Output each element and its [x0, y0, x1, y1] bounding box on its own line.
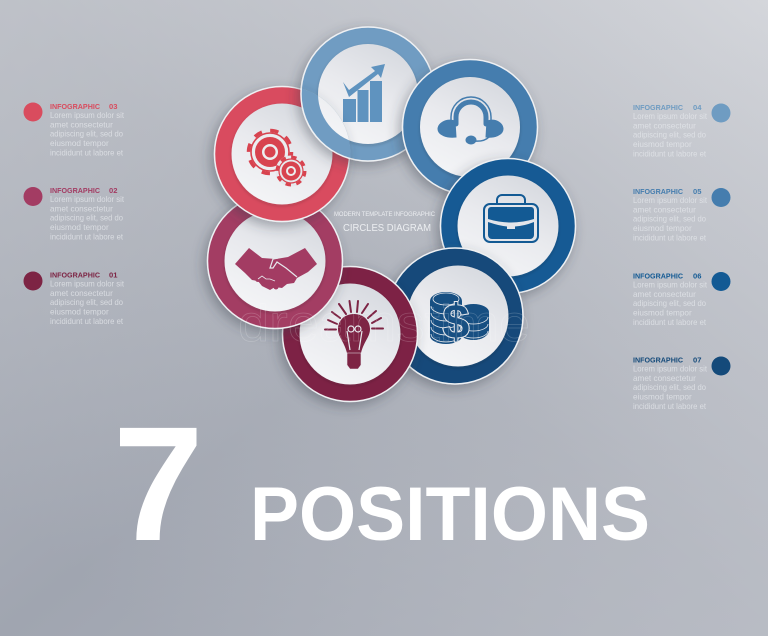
- legend item 03: eiusmod tempor: [50, 139, 109, 148]
- panel: circle 04 overlap onto circle 03: [290, 86, 350, 172]
- legend item 03: Lorem ipsum dolor sit: [50, 111, 125, 120]
- legend item 07: [633, 356, 730, 411]
- panel: circle 07 coins: [387, 248, 523, 384]
- legend item 05: adipiscing elit, sed do: [633, 215, 706, 224]
- legend item 06: [633, 272, 730, 327]
- legend item 04: amet consectetur: [633, 121, 696, 130]
- legend item 01: Lorem ipsum dolor sit: [50, 280, 125, 288]
- legend item 06: 06: [693, 272, 701, 280]
- watermark: dreamstime: [238, 295, 530, 353]
- legend item 01: incididunt ut labore et: [50, 317, 124, 326]
- center caption: CIRCLES DIAGRAM: [343, 223, 431, 234]
- legend item 06: incididunt ut labore et: [633, 318, 707, 327]
- legend item 06: adipiscing elit, sed do: [633, 299, 706, 308]
- legend item 02: [24, 186, 125, 241]
- legend item 02: INFOGRAPHIC: [50, 186, 100, 195]
- legend item 07: INFOGRAPHIC: [633, 356, 683, 364]
- center caption: [334, 212, 436, 234]
- legend item 04: 04: [693, 103, 702, 112]
- legend item 06: INFOGRAPHIC: [633, 272, 683, 280]
- legend item 02: 02: [109, 186, 117, 195]
- legend item 06: eiusmod tempor: [633, 308, 692, 318]
- legend item 07: amet consectetur: [633, 374, 696, 383]
- legend item 03: [24, 102, 125, 157]
- legend item 05: eiusmod tempor: [633, 224, 692, 233]
- legend item 07: adipiscing elit, sed do: [633, 383, 706, 392]
- legend item 03: incididunt ut labore et: [50, 148, 124, 157]
- legend item 06: amet consectetur: [633, 290, 696, 299]
- legend item 04: incididunt ut labore et: [633, 149, 707, 158]
- title number 7: 7: [113, 392, 204, 575]
- panel: circle 07 coins: $: [443, 296, 470, 349]
- legend item 07: Lorem ipsum dolor sit: [633, 364, 708, 374]
- panel: circle 04 analytics: [301, 27, 435, 161]
- legend item 01: [24, 270, 125, 326]
- panel: circle 03 gears: [214, 86, 350, 222]
- legend item 04: adipiscing elit, sed do: [633, 131, 706, 140]
- legend item 02: Lorem ipsum dolor sit: [50, 195, 125, 204]
- panel: circle 02 handshake: [208, 194, 342, 328]
- legend item 02: incididunt ut labore et: [50, 232, 124, 241]
- legend item 04: INFOGRAPHIC: [633, 103, 683, 112]
- legend item 02: amet consectetur: [50, 204, 113, 213]
- legend item 05: [633, 187, 730, 242]
- legend item 05: incididunt ut labore et: [633, 233, 707, 242]
- legend item 04: eiusmod tempor: [633, 140, 692, 149]
- legend item 06: Lorem ipsum dolor sit: [633, 280, 708, 290]
- legend item 07: incididunt ut labore et: [633, 402, 707, 411]
- legend item 05: 05: [693, 187, 702, 196]
- legend item 01: adipiscing elit, sed do: [50, 298, 123, 307]
- legend item 05: amet consectetur: [633, 205, 696, 214]
- legend item 03: amet consectetur: [50, 120, 113, 129]
- legend item 02: adipiscing elit, sed do: [50, 214, 123, 223]
- legend item 01: 01: [109, 270, 118, 280]
- legend item 05: INFOGRAPHIC: [633, 187, 683, 196]
- legend item 05: Lorem ipsum dolor sit: [633, 196, 708, 205]
- legend item 07: 07: [693, 356, 701, 364]
- title word POSITIONS: POSITIONS: [250, 472, 650, 557]
- panel: circle 06 briefcase: [440, 158, 576, 294]
- panel: circle 05 headset: [402, 60, 538, 194]
- legend item 03: INFOGRAPHIC: [50, 102, 100, 111]
- legend item 01: eiusmod tempor: [50, 308, 109, 316]
- legend item 02: eiusmod tempor: [50, 223, 109, 232]
- legend item 07: eiusmod tempor: [633, 392, 692, 402]
- legend item 04: [633, 103, 730, 158]
- panel: circle 01 light bulb: [282, 266, 418, 402]
- legend item 04: Lorem ipsum dolor sit: [633, 112, 708, 121]
- legend item 01: INFOGRAPHIC: [50, 270, 100, 280]
- legend item 03: adipiscing elit, sed do: [50, 130, 123, 139]
- legend item 03: 03: [109, 102, 117, 111]
- legend item 01: amet consectetur: [50, 289, 113, 298]
- center caption: MODERN TEMPLATE INFOGRAPHIC: [334, 212, 436, 218]
